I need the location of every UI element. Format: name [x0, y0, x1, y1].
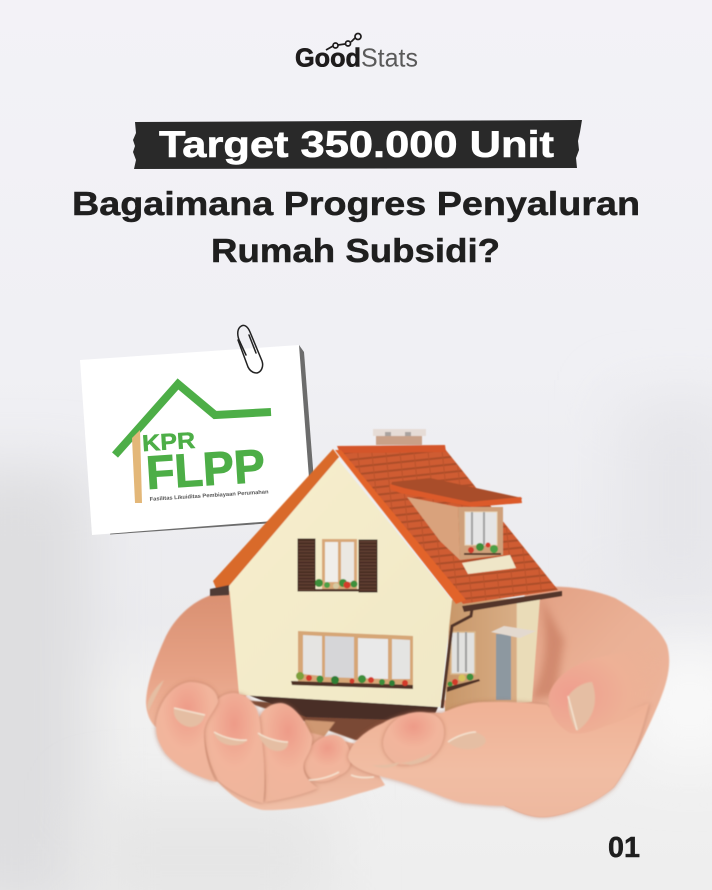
- index finger: [304, 735, 351, 782]
- left eave: [213, 449, 339, 588]
- GoodStats logo: Good: [295, 42, 361, 72]
- nails: [147, 680, 595, 768]
- left hand back: [146, 590, 260, 727]
- right hand palm: [348, 702, 649, 817]
- logo letters: Fasilitas Likuiditas Pembiayaan Perumahan: [150, 489, 269, 503]
- nail highlights: [174, 696, 577, 780]
- middle finger: [258, 703, 318, 802]
- ring finger: [204, 693, 265, 803]
- side window: [447, 632, 480, 692]
- front fingers: [147, 645, 663, 817]
- front wall: [229, 458, 452, 707]
- card shadow: [110, 345, 317, 534]
- thumb: [549, 645, 663, 734]
- downpipe: [442, 609, 472, 708]
- back hands: [146, 586, 669, 817]
- roof main: [337, 449, 558, 604]
- title highlight text: Target 350.000 Unit: [159, 124, 554, 165]
- heading: [72, 185, 640, 269]
- right finger tip: [383, 712, 444, 765]
- gutter: [462, 591, 562, 612]
- little finger: [156, 682, 218, 782]
- side wall: [445, 598, 540, 712]
- heading: Bagaimana Progres Penyaluran: [72, 185, 640, 222]
- door: [491, 626, 536, 700]
- upper window: [298, 539, 377, 592]
- model house: [210, 429, 562, 721]
- left hand lower: [165, 725, 385, 810]
- heading: Rumah Subsidi?: [211, 232, 500, 269]
- logo letters: FLPP: [144, 439, 266, 499]
- logo roof: [115, 384, 271, 455]
- right eave: [335, 450, 466, 604]
- icon: growth line: [326, 34, 361, 50]
- lower window: [291, 631, 413, 689]
- dormer: [390, 478, 522, 574]
- logo letters: KPR: [141, 427, 196, 456]
- FLPP logo: [115, 384, 271, 503]
- chimney: [373, 429, 426, 445]
- GoodStats logo: [295, 34, 418, 72]
- icon: paperclip: [238, 325, 263, 373]
- GoodStats logo: Stats: [361, 42, 418, 72]
- base: [248, 695, 438, 721]
- logo post: [132, 430, 142, 503]
- right hand back: [440, 586, 669, 817]
- title tape banner: [133, 120, 582, 169]
- shadow under house: [240, 700, 450, 745]
- FLPP note card: [80, 345, 312, 535]
- page number: 01: [608, 832, 640, 864]
